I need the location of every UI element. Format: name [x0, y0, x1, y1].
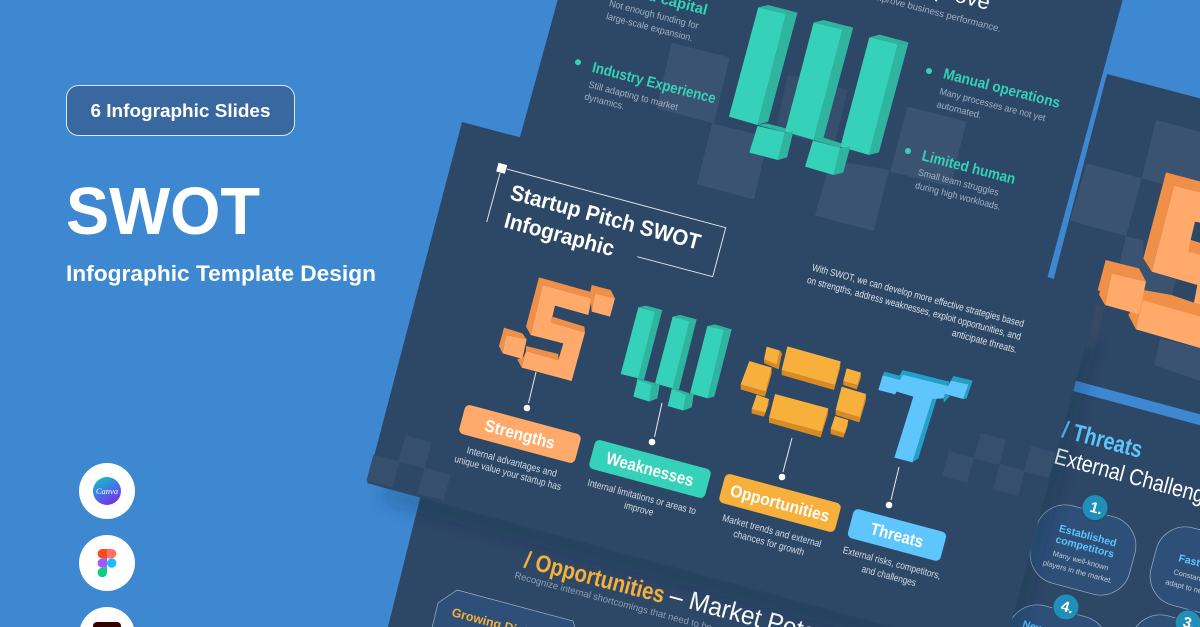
- label: opportunities: Opportunities: [728, 481, 832, 526]
- connector: weaknesses: [649, 403, 662, 445]
- icon: blue pixel T: [878, 370, 973, 462]
- background pixel tiles: [656, 43, 966, 232]
- text: industry experience: Industry Experience: [590, 59, 718, 107]
- card: new entrants: 4.: [1059, 598, 1075, 617]
- card: third threat: [1118, 608, 1200, 627]
- subtitle: Infographic Template Design: [66, 261, 376, 286]
- icon: figma: [79, 535, 135, 591]
- panel: opportunities slide: [380, 478, 1020, 627]
- title: SWOT: SWOT: [66, 174, 260, 249]
- text: manual operations: [926, 65, 1062, 124]
- title frame: [487, 163, 726, 277]
- caption: strengths: [453, 445, 562, 493]
- label: weaknesses: Weaknesses: [604, 449, 696, 490]
- text: limited human: Limited human: [920, 147, 1017, 188]
- card: established competitors: Established: [1058, 523, 1118, 550]
- card: fast-changing trends: [1143, 519, 1200, 624]
- card: established competitors: Many well-known: [1052, 549, 1110, 572]
- background pixel tiles right: [942, 433, 1056, 496]
- card: growing digital: [428, 590, 580, 627]
- caption: opportunities: chances for growth: [732, 529, 805, 558]
- heading: threats: [1052, 416, 1200, 513]
- connector: threats: [886, 467, 899, 508]
- icon: teal pixel W: [621, 306, 732, 411]
- text: limited capital: [603, 0, 709, 44]
- caption: weaknesses: Internal limitations or areas to: [586, 478, 698, 517]
- intro paragraph: on strengths, address weaknesses, exploit opportunities, and: [806, 275, 1022, 343]
- caption: strengths: unique value your startup has: [453, 454, 562, 493]
- card: established competitors: players in the market.: [1042, 558, 1113, 585]
- slide shadow: [385, 340, 1088, 627]
- text: limited human: [905, 147, 1017, 213]
- text: manual operations: automated.: [935, 99, 983, 121]
- label: strengths: [458, 404, 582, 464]
- panel: top slide weaknesses detail: [500, 0, 1124, 400]
- icon: teal pixel W: [729, 5, 909, 175]
- heading: opportunities: [521, 547, 863, 627]
- card: established competitors: competitors: [1054, 534, 1116, 561]
- label: threats: [847, 508, 947, 562]
- intro paragraph: anticipate threats.: [951, 328, 1018, 356]
- caption: threats: External risks, competitors,: [841, 545, 942, 582]
- panel: right slide with large S: [1040, 74, 1200, 417]
- caption: opportunities: Market trends and external: [721, 513, 822, 550]
- badge: 6 infographic slides: [66, 86, 294, 136]
- caption: weaknesses: improve: [623, 500, 655, 519]
- panel: central startup pitch slide: [366, 122, 1100, 627]
- text: limited capital: large-scale expansion.: [605, 11, 694, 44]
- icon: canva: Canva: [96, 486, 118, 496]
- background pixel tiles left: [366, 435, 451, 501]
- connector: strengths: [524, 372, 536, 411]
- heading: opportunities: / Opportunities: [521, 547, 668, 609]
- icon: amber pixel O: [741, 346, 866, 438]
- caption: threats: and challenges: [860, 564, 917, 589]
- badge: 6 infographic slides: 6 Infographic Slides: [90, 101, 270, 121]
- text: industry experience: Still adapting to market: [587, 80, 679, 113]
- text: manual operations: Manual operations: [941, 65, 1062, 112]
- label: threats: Threats: [868, 519, 925, 552]
- card: new entrants: [995, 594, 1115, 627]
- intro paragraph: With SWOT, we can develop more effective strategies based: [811, 263, 1025, 330]
- connector: opportunities: [779, 438, 792, 480]
- label: strengths: Strengths: [483, 416, 557, 453]
- icon: orange pixel S: [499, 277, 615, 381]
- panel: threats slide: [940, 382, 1200, 627]
- heading: startup pitch swot infographic: Startup Pitch SWOT: [508, 180, 704, 255]
- text: industry experience: dynamics.: [583, 92, 626, 112]
- icon: canva: [79, 463, 135, 519]
- heading: startup pitch swot infographic: Infographic: [502, 208, 617, 261]
- card: established competitors: [1023, 495, 1143, 602]
- card: established competitors: 1.: [1088, 499, 1104, 518]
- caption: strengths: Internal advantages and: [465, 445, 558, 480]
- icon: third design tool: [79, 607, 135, 627]
- label: weaknesses: [588, 439, 712, 499]
- text: limited human: during high workloads.: [914, 180, 1002, 213]
- text: limited human: Small team struggles: [917, 167, 1000, 199]
- text: manual operations: Many processes are not yet: [938, 86, 1047, 124]
- heading: threats: / Threats: [1059, 416, 1145, 464]
